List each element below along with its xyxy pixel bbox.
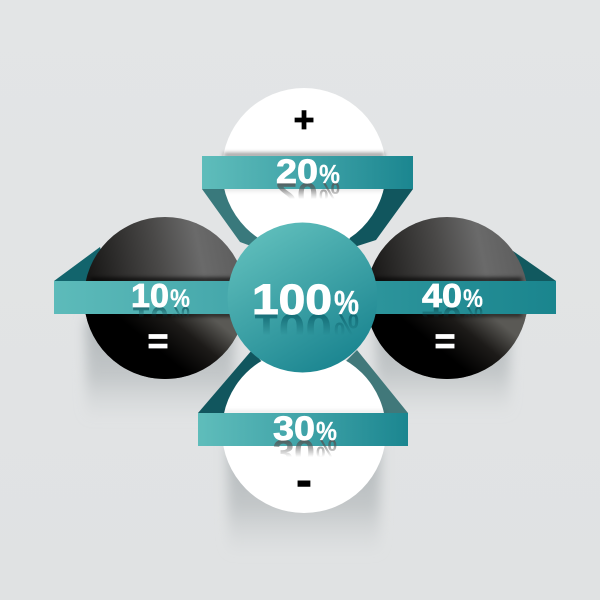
label: 40%: % [463,285,483,313]
reflection: 30%: 30 [273,432,315,470]
reflection: 10% and 40%: 40 [422,300,462,337]
reflection: 20%: 20 [276,175,318,213]
label: 100%: % [334,284,359,321]
circle: top white [222,88,386,252]
label: 20% [276,153,340,191]
label: 10%: % [170,285,190,313]
circle: left dark [84,217,246,379]
label: 20%: 20 [276,153,318,191]
reflection: 20% [277,183,340,198]
label: 100% [252,276,359,324]
reflection: 20%: % [319,177,340,207]
symbol: equals left: = [147,320,169,361]
band: right [365,281,556,314]
reflection: 100%: 100 [252,304,332,352]
ribbon folds: top [202,189,413,250]
band: top [202,156,413,189]
reflection: 10% and 40%: % [170,301,190,329]
hub circle [228,222,378,372]
band: bottom [198,413,408,446]
reflection: 30% [274,440,336,456]
label: 10% [131,277,190,314]
circle: right dark [366,217,528,379]
label: 40%: 40 [422,277,462,314]
symbol: minus: - [296,454,312,507]
circle: bottom white [222,349,386,513]
label: 30%: % [316,416,337,446]
reflection: 10% and 40%: % [463,301,483,329]
reflection: 100% [255,314,358,332]
label: 10%: 10 [131,277,169,314]
symbol: plus: + [293,99,315,140]
ribbon folds: bottom [198,350,408,413]
ribbon folds: sides [54,247,556,281]
label: 20%: % [319,159,340,189]
symbol: equals right: = [434,320,456,361]
reflection: 30%: % [316,434,337,464]
label: 30% [273,410,337,448]
reflection: 100%: % [334,307,359,344]
drop shadows [86,320,510,555]
reflection: 10% and 40%: 10 [131,300,169,337]
reflection: 10% and 40% [133,307,482,316]
band: left [54,281,244,314]
band shadows [90,153,522,413]
label: 40% [422,277,483,314]
label: 30%: 30 [273,410,315,448]
label: 100%: 100 [252,276,332,324]
